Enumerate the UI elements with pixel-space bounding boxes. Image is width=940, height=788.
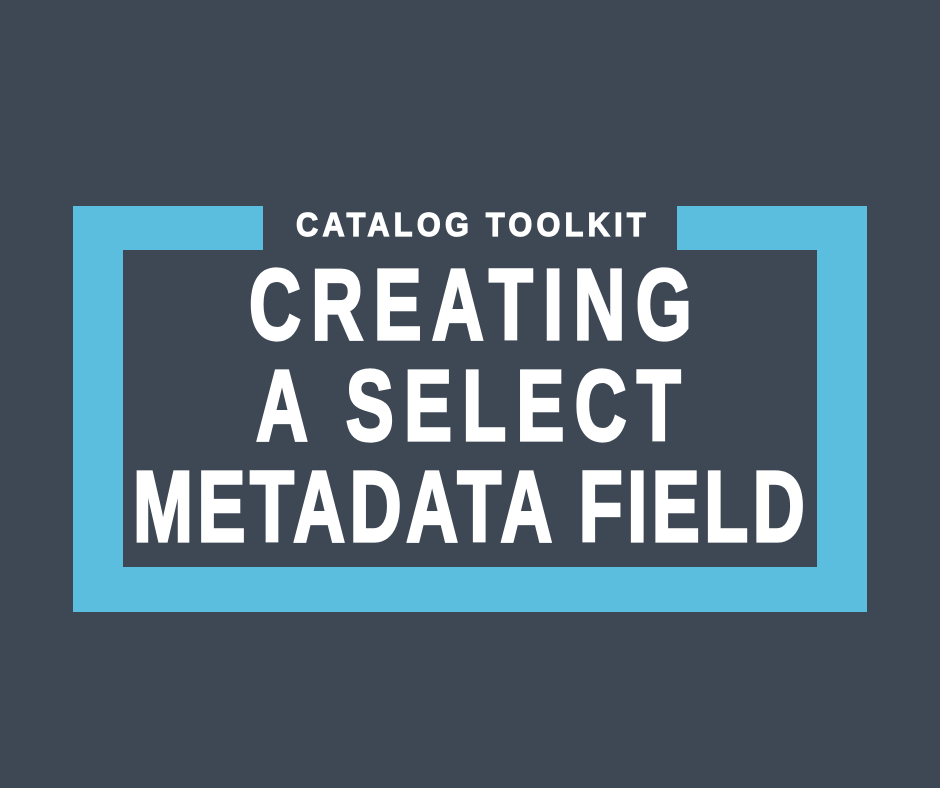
title line 1: CREATING — [249, 249, 692, 361]
eyebrow: catalog toolkit: CATALOG TOOLKIT — [296, 206, 646, 243]
blue bracket frame — [73, 206, 867, 612]
title line 2: A SELECT — [256, 350, 681, 462]
title line 3: METADATA FIELD — [133, 451, 805, 563]
title block — [133, 249, 805, 563]
